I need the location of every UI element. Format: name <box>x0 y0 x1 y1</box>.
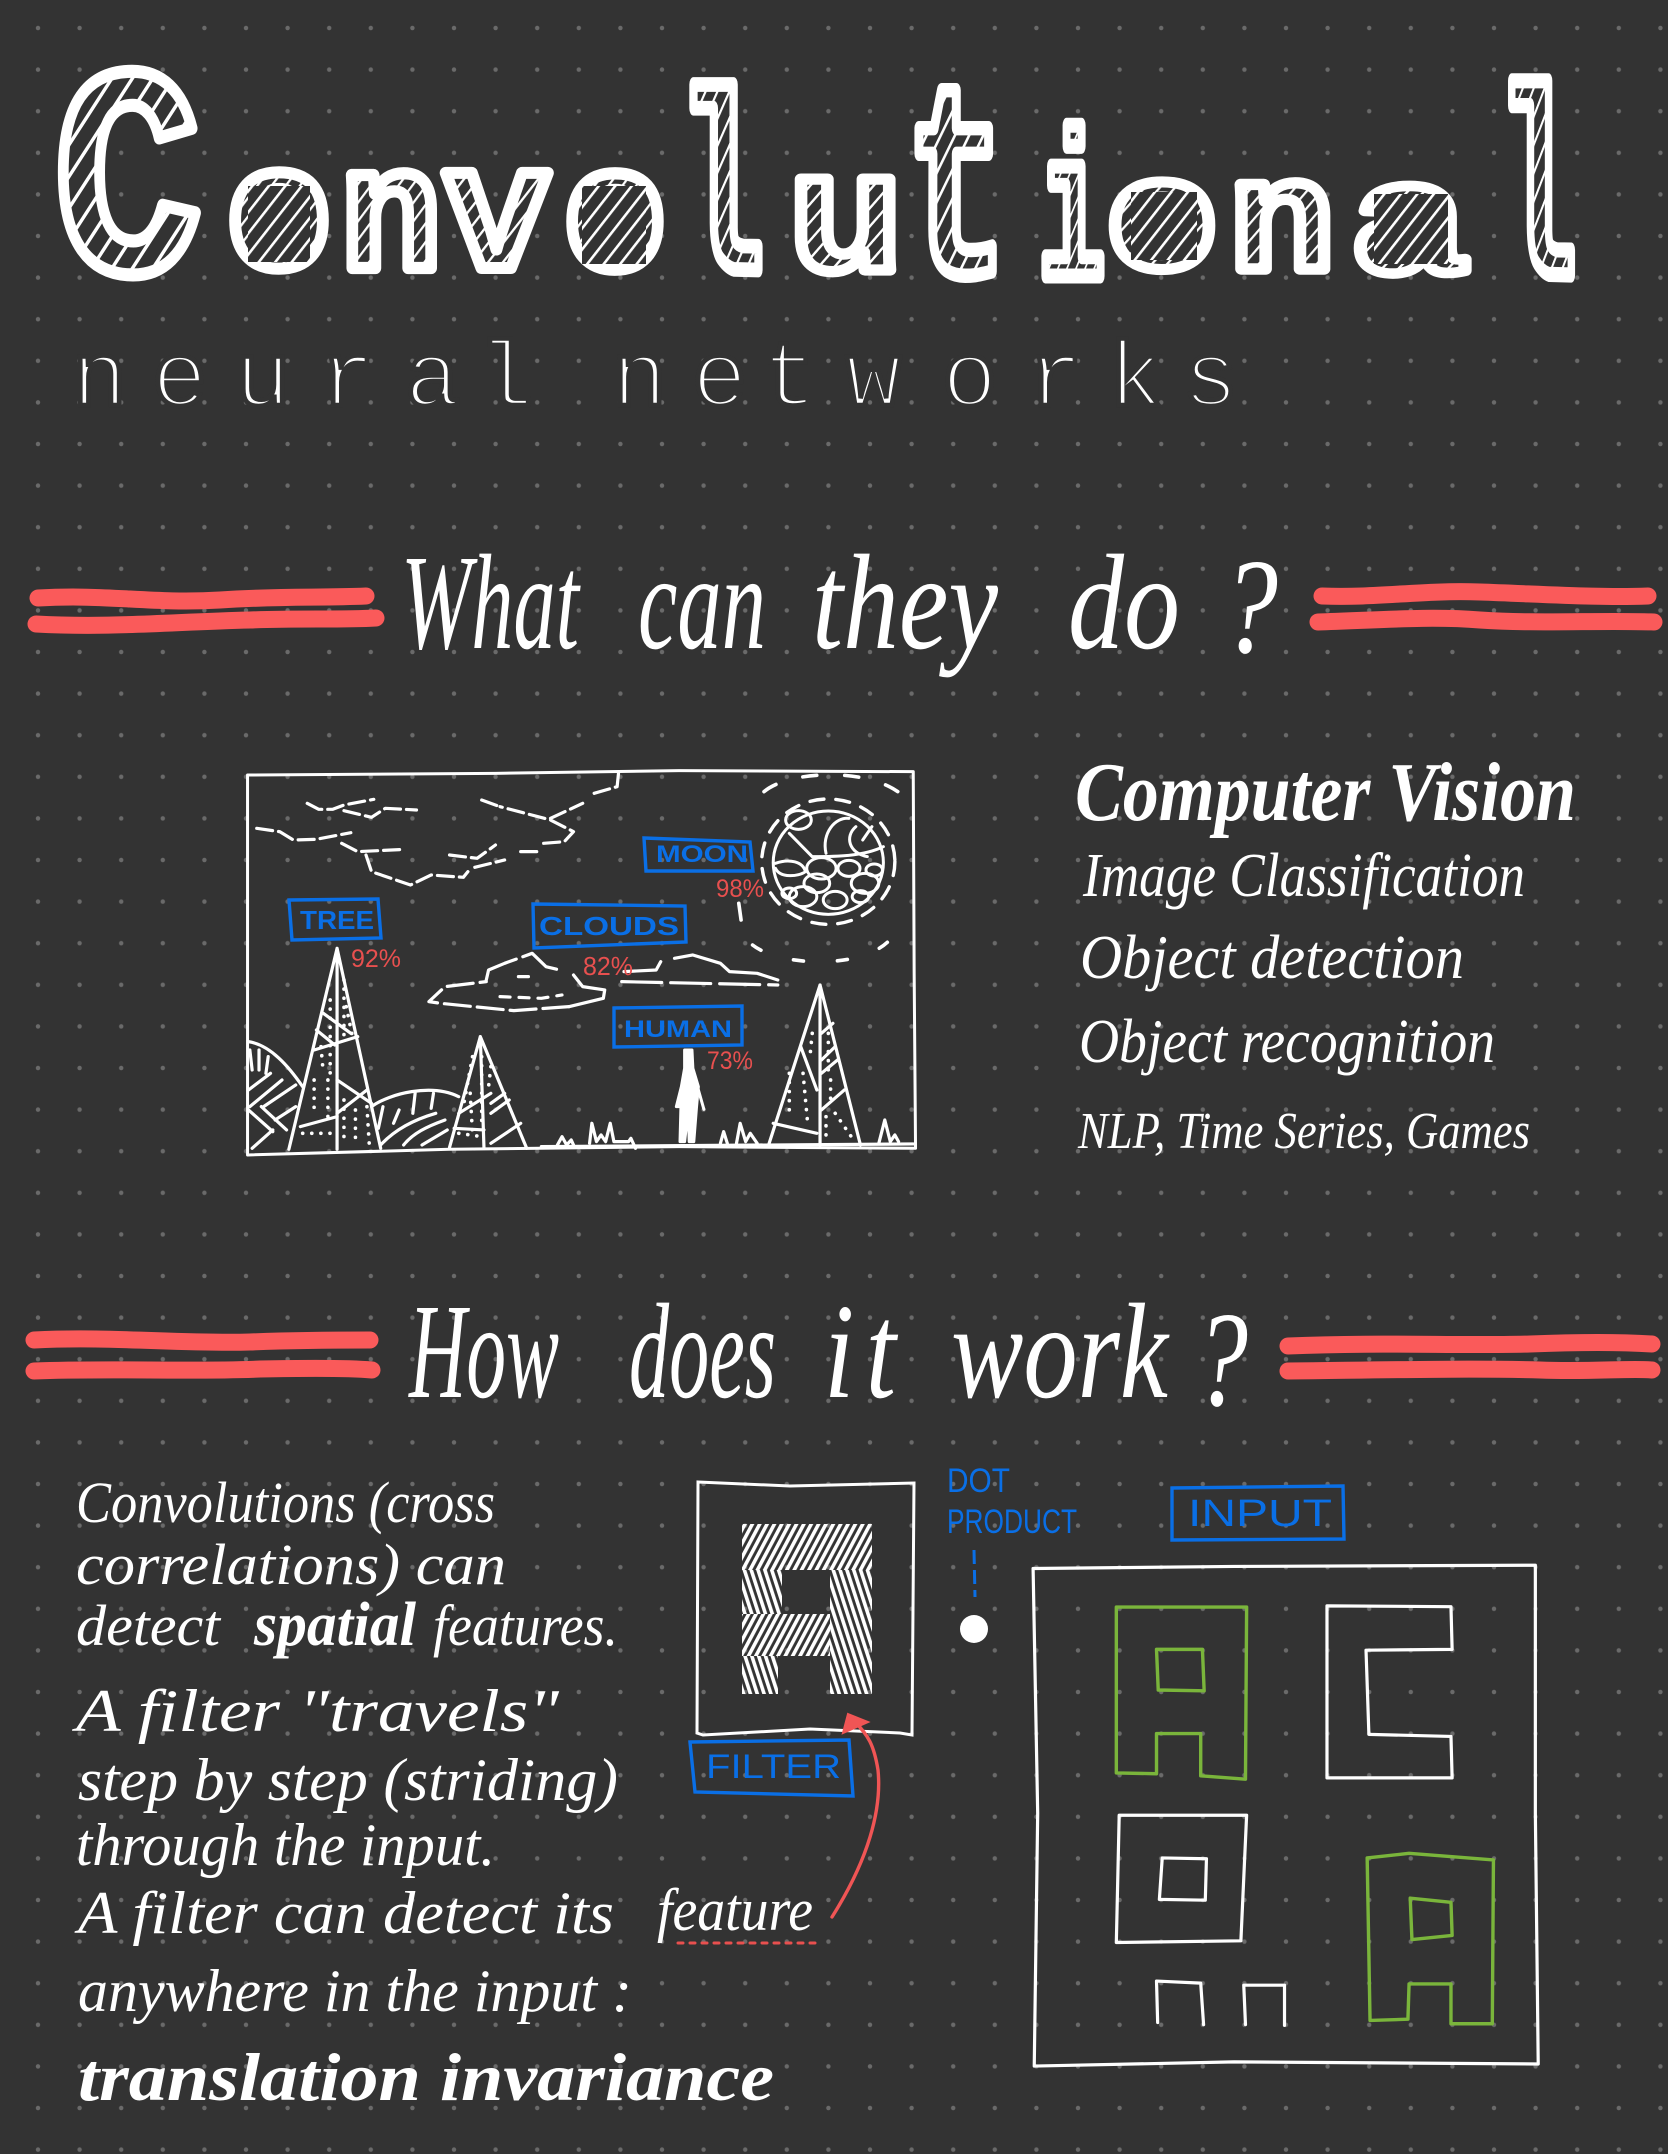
heading: what can they do: What <box>401 528 581 678</box>
title: n <box>341 122 441 321</box>
label: filter: FILTER <box>706 1748 841 1786</box>
section divider: how does it work left <box>34 1339 372 1371</box>
text block: explanation: correlations) can <box>76 1532 506 1597</box>
heading: how does it work: work <box>951 1277 1170 1427</box>
label: tree <box>289 899 401 973</box>
text block: explanation: spatial <box>253 1591 417 1659</box>
title: v <box>443 119 551 323</box>
shape: green match bottom right <box>1367 1853 1493 2024</box>
grass and ground <box>541 1120 913 1148</box>
title: n <box>1229 136 1335 318</box>
title: u <box>788 127 904 322</box>
title: l <box>678 58 764 348</box>
title: o <box>1107 134 1217 316</box>
title: t <box>905 46 1009 358</box>
section divider: how does it work right <box>1288 1342 1652 1371</box>
subtitle: neural networks <box>72 328 1238 433</box>
heading: how does it work: How <box>408 1277 559 1427</box>
title: a <box>1350 139 1470 321</box>
label: clouds <box>533 904 686 981</box>
text block: explanation: A filter "travels" <box>71 1678 560 1744</box>
icon: dot product operator <box>960 1615 988 1643</box>
title: l <box>1497 53 1577 356</box>
text block: explanation: features. <box>433 1593 618 1658</box>
text block: computer vision: Computer Vision <box>1075 746 1576 839</box>
label: moon <box>644 838 764 903</box>
heading: what can they do: can <box>638 528 766 678</box>
label: filter <box>690 1740 853 1796</box>
title: o <box>227 121 331 321</box>
heading: how does it work: it <box>824 1276 898 1427</box>
label: clouds: 82% <box>583 951 633 981</box>
label: input: INPUT <box>1188 1493 1332 1535</box>
word: feature with underline: feature <box>657 1877 813 1943</box>
label: human: 73% <box>707 1047 753 1075</box>
text block: explanation: Convolutions (cross <box>76 1470 495 1535</box>
upper clouds <box>257 773 618 885</box>
label: dot product: DOT <box>947 1462 1010 1500</box>
text block: computer vision <box>1075 746 1576 1160</box>
text block: explanation: detect <box>76 1593 222 1658</box>
label: dot product <box>947 1462 1077 1597</box>
label: tree: TREE <box>300 905 374 935</box>
heading: what can they do <box>401 528 1278 682</box>
section divider: what can they do right <box>1318 592 1654 622</box>
text block: computer vision: Object detection <box>1080 924 1464 992</box>
heading: how does it work: does <box>629 1277 776 1427</box>
arrow: feature to filter <box>832 1714 879 1917</box>
text block: computer vision: Object recognition <box>1079 1008 1495 1076</box>
label: dot product: PRODUCT <box>947 1503 1077 1541</box>
text block: explanation: anywhere in the input : <box>78 1958 632 2024</box>
human figure <box>676 1050 704 1142</box>
panel: input image <box>1033 1565 1538 2066</box>
title: i <box>1039 102 1105 339</box>
text block: explanation: through the input. <box>76 1812 495 1878</box>
trees <box>289 948 860 1149</box>
label: moon: MOON <box>656 841 748 868</box>
label: tree: 92% <box>351 945 401 973</box>
shape: two small gates <box>1157 1981 1285 2025</box>
label: clouds: CLOUDS <box>539 911 679 941</box>
lower clouds <box>429 953 778 1011</box>
shape: white c <box>1327 1606 1452 1778</box>
label: human: HUMAN <box>624 1016 732 1043</box>
label: human <box>614 1006 753 1075</box>
heading: what can they do: do <box>1068 528 1180 678</box>
heading: what can they do: they <box>812 528 999 678</box>
section divider: what can they do left <box>36 596 376 625</box>
input frame <box>1033 1565 1538 2066</box>
title <box>54 22 1577 362</box>
filter hatched cells <box>742 1524 872 1694</box>
label: input <box>1172 1486 1344 1540</box>
heading: what can they do: ? <box>1222 532 1278 682</box>
title: C <box>54 22 202 362</box>
text block: computer vision: Image Classification <box>1082 842 1525 910</box>
text block: explanation: A filter can detect its <box>74 1880 614 1946</box>
panel: image recognition scene <box>248 771 916 1155</box>
hills <box>248 1042 459 1148</box>
scene frame <box>248 771 916 1155</box>
text block: explanation: translation invariance <box>78 2039 774 2115</box>
shape: green match top left <box>1116 1607 1247 1779</box>
heading: how does it work <box>408 1276 1248 1435</box>
panel: filter box <box>697 1482 914 1735</box>
text block: explanation <box>71 1470 774 2115</box>
tree stipple <box>303 980 854 1143</box>
moon <box>739 775 904 962</box>
shape: white o <box>1116 1815 1247 1942</box>
title: o <box>565 122 665 321</box>
text block: computer vision: NLP, Time Series, Games <box>1077 1103 1530 1160</box>
label: moon: 98% <box>716 875 764 903</box>
heading: how does it work: ? <box>1195 1285 1248 1435</box>
text block: explanation: step by step (striding) <box>78 1747 618 1813</box>
